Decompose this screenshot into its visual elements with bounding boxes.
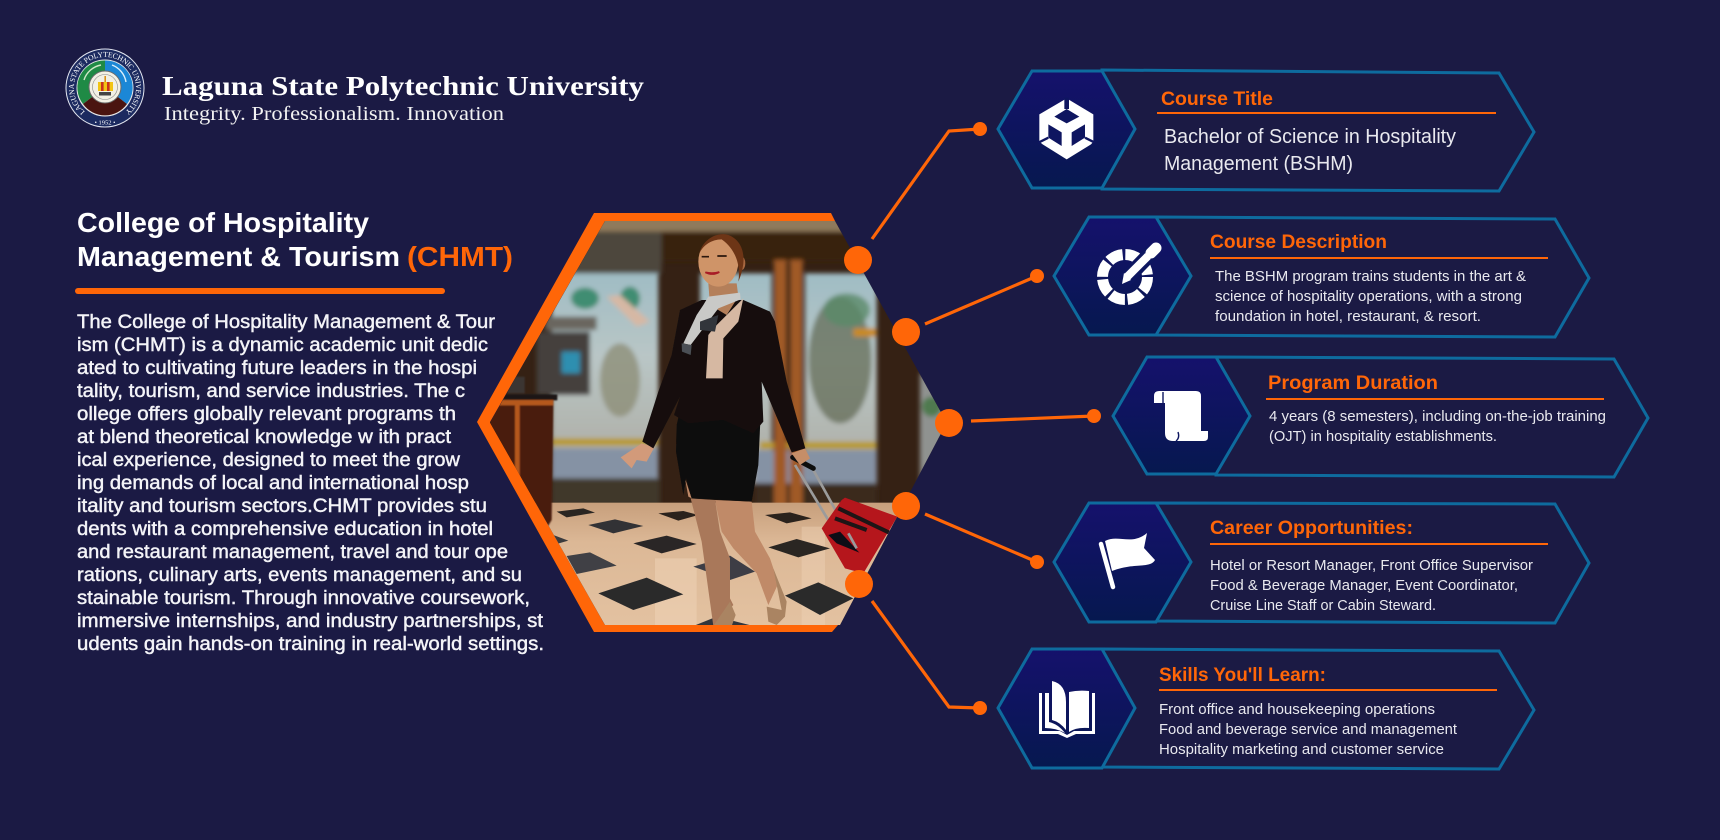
text: course description: foundation in hotel, restaurant, & resort. [1215,308,1481,325]
heading: career opportunities: Career Opportunities: [1210,518,1413,539]
text: course description: science of hospitality operations, with a strong [1215,288,1522,305]
text: course title: Bachelor of Science in Hospitality [1164,126,1456,148]
icon hexagon: skills [998,649,1135,768]
heading: (CHMT) [407,241,513,272]
intro paragraph: ism (CHMT) is a dynamic academic unit dedic [77,334,488,356]
intro paragraph: ical experience, designed to meet the grow [77,449,461,471]
heading [77,207,513,272]
connector: to course title [872,129,980,239]
icon hexagon: course description [1054,217,1191,335]
scarf [683,293,741,345]
intro paragraph: udents gain hands-on training in real-world settings. [77,633,544,655]
neck [708,283,738,315]
panel: course title [998,70,1534,191]
panel: skills you'll learn [998,649,1534,769]
jacket [642,300,805,452]
text: course title [1164,126,1456,175]
text: program duration: (OJT) in hospitality establishments. [1269,428,1497,445]
heading: College of Hospitality [77,207,369,238]
intro paragraph: tality, tourism, and service industries. The c [77,380,465,402]
icon: flag [1101,533,1155,587]
junction dots on hexagon [844,246,963,598]
university name: Laguna State Polytechnic University [162,71,645,101]
text: course description: The BSHM program trains students in the art & [1215,268,1526,285]
intro paragraph [77,311,544,655]
suitcase handle [794,464,836,520]
intro paragraph: at blend theoretical knowledge w ith pract [77,426,452,448]
head [698,237,738,287]
text: career opportunities: Hotel or Resort Manager, Front Office Supervisor [1210,557,1533,574]
icon hexagon: course title [998,71,1135,188]
heading: program duration: Program Duration [1268,373,1438,394]
icon hexagon: program duration [1113,357,1250,474]
university logo seal: • 1952 • [95,120,115,126]
text: career opportunities: Cruise Line Staff or Cabin Steward. [1210,597,1436,614]
endpoint dots [973,122,1101,715]
intro paragraph: itality and tourism sectors.CHMT provides stu [77,495,487,517]
panel: course description [1054,217,1589,337]
text: course description [1215,268,1526,325]
intro paragraph: The College of Hospitality Management & Tour [77,311,496,333]
intro paragraph: rations, culinary arts, events management, and su [77,564,522,586]
hexagon photo: hospitality student with suitcase in lobby [490,221,941,625]
heading: course title: Course Title [1161,89,1273,110]
text: program duration: 4 years (8 semesters), including on-the-job training [1269,408,1606,425]
icon: scroll [1154,391,1208,441]
text: career opportunities: Food & Beverage Manager, Event Coordinator, [1210,577,1518,594]
heading: course description: Course Description [1210,232,1387,253]
legs [691,498,733,626]
text: skills: Food and beverage service and management [1159,721,1458,738]
heading: skills: Skills You'll Learn: [1159,665,1326,686]
connector: to skills [872,601,980,708]
intro paragraph: dents with a comprehensive education in hotel [77,518,493,540]
text: skills [1159,701,1458,758]
text: career opportunities [1210,557,1533,614]
blouse [706,298,743,378]
skirt [676,413,761,502]
icon: cube logo [1038,98,1095,159]
intro paragraph: ated to cultivating future leaders in the hospi [77,357,477,379]
text: program duration [1269,408,1606,445]
hexagon orange frame [477,213,838,632]
icon hexagon: career opportunities [1054,503,1191,622]
heading underline [75,288,445,294]
intro paragraph: ing demands of local and international hosp [77,472,469,494]
panel: program duration [1113,357,1648,477]
intro paragraph: and restaurant management, travel and tour ope [77,541,508,563]
university logo seal: LAGUNA STATE POLYTECHNIC UNIVERSITY [68,52,142,116]
hands [621,443,654,468]
icon: open book [1039,681,1095,738]
connector: to career opportunities [925,514,1037,562]
intro paragraph: stainable tourism. Through innovative coursework, [77,587,530,609]
tagline: Integrity. Professionalism. Innovation [164,103,504,125]
panel: career opportunities [1054,503,1589,623]
heading: Management & Tourism [77,241,400,272]
intro paragraph: ollege offers globally relevant programs th [77,403,456,425]
text: course title: Management (BSHM) [1164,153,1353,175]
connector: to program duration [971,416,1094,421]
icon: colour wheel with eyedropper [1102,248,1156,300]
intro paragraph: immersive internships, and industry partnerships, st [77,610,544,632]
text: skills: Hospitality marketing and customer service [1159,741,1444,758]
connector: to course description [925,276,1037,324]
text: skills: Front office and housekeeping operations [1159,701,1435,718]
